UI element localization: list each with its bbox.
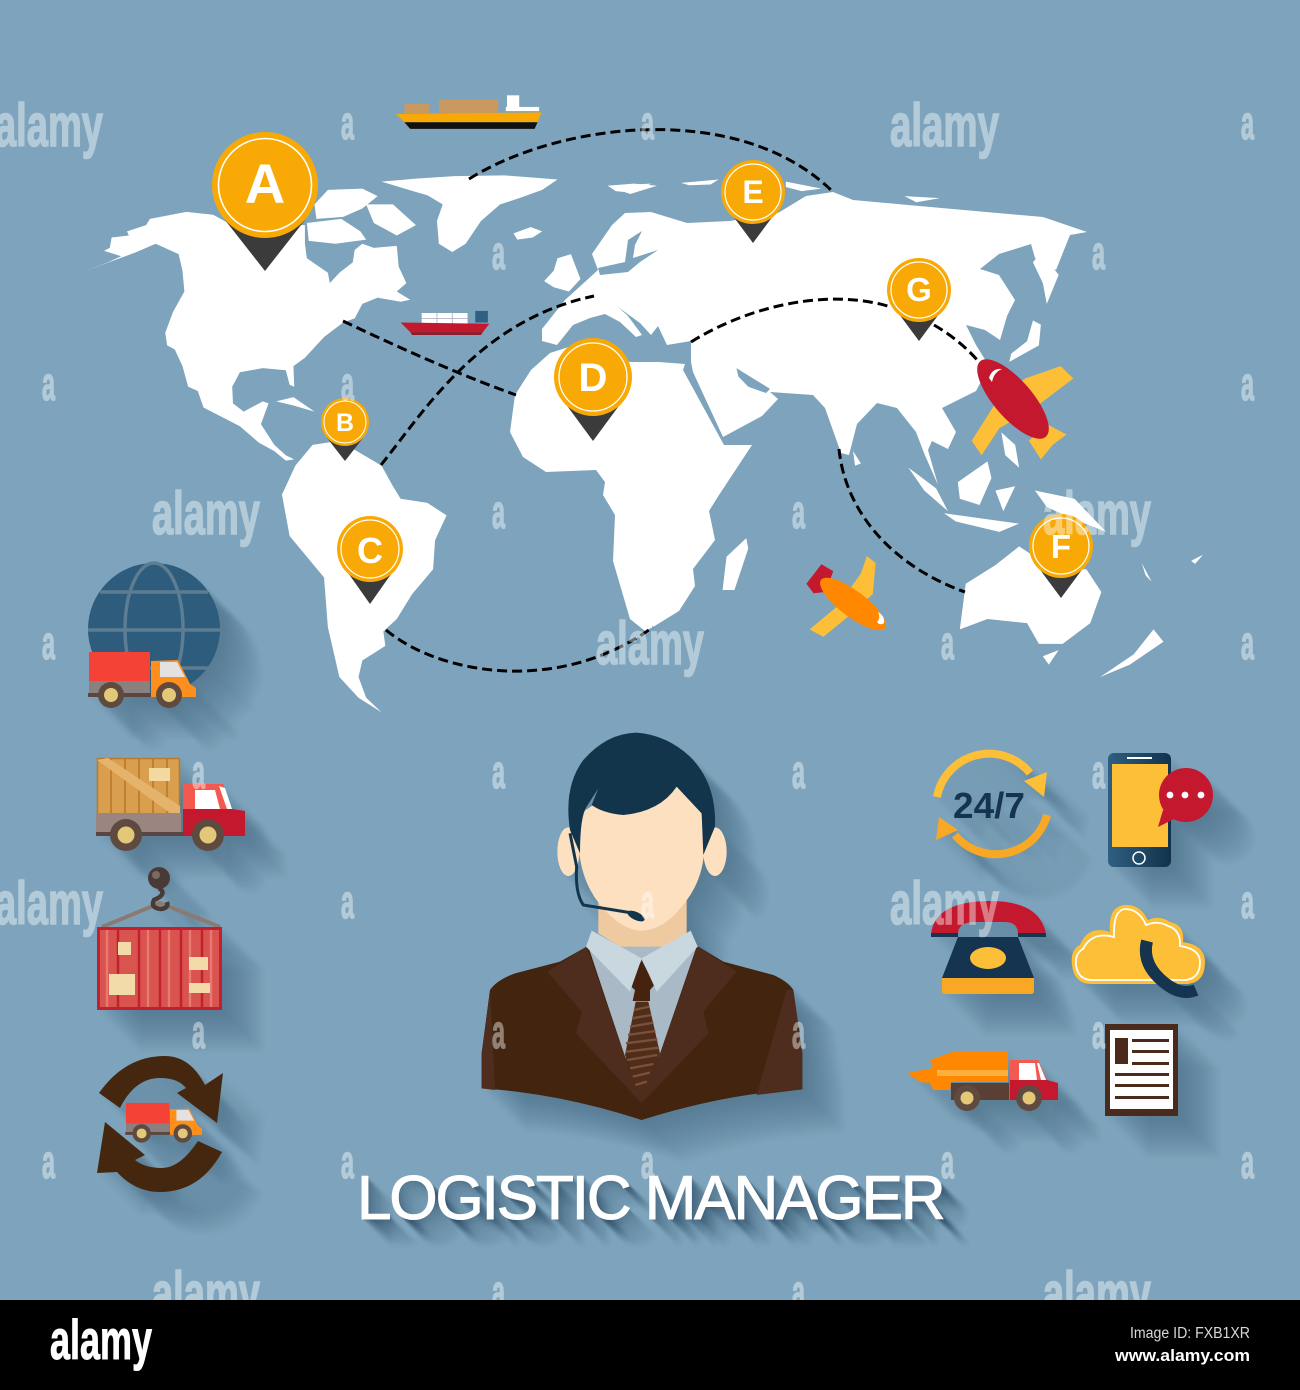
alamy watermarks: a [341, 875, 354, 928]
small truck [125, 1103, 202, 1143]
alamy watermarks: a [42, 616, 55, 669]
alamy watermarks: a [1241, 357, 1254, 410]
chat bubble [1158, 768, 1213, 827]
truck body [88, 652, 196, 708]
image id: Image ID: FXB1XR [1130, 1325, 1250, 1342]
alamy watermarks: a [341, 96, 354, 149]
alamy watermarks: alamy [890, 870, 999, 937]
alamy watermarks: alamy [152, 1260, 260, 1327]
map: asia-pacific islands and australia [608, 180, 1203, 677]
alamy watermarks: a [941, 1135, 954, 1188]
icon: globe with truck [88, 563, 220, 708]
manager figure [482, 733, 802, 1120]
icon: rotary telephone [931, 901, 1046, 994]
pin F: F [1051, 528, 1071, 565]
icon: 24/7 [936, 754, 1047, 854]
alamy watermarks: a [641, 875, 654, 928]
website: www.alamy.com [1114, 1346, 1250, 1365]
pin B [321, 398, 369, 461]
icon: speeding truck with flames [907, 1051, 1058, 1111]
icon: circular arrows with truck [97, 1056, 223, 1192]
pin C [337, 516, 403, 604]
alamy watermarks: a [1241, 875, 1254, 928]
alamy watermarks: a [341, 1135, 354, 1188]
icon: smartphone with chat bubble [1108, 753, 1213, 867]
alamy watermarks: alamy [1043, 1260, 1151, 1327]
pin F [1029, 514, 1093, 598]
map: south america [282, 441, 447, 712]
alamy watermarks: a [1092, 226, 1105, 279]
alamy watermarks: a [192, 745, 205, 798]
alamy watermarks: a [792, 485, 805, 538]
alamy watermarks: alamy [596, 610, 704, 677]
map: africa [510, 345, 752, 631]
pin A [212, 132, 318, 271]
alamy watermarks: alamy [1043, 480, 1151, 547]
alamy watermarks: a [1092, 745, 1105, 798]
footer logo: alamy [50, 1308, 152, 1371]
cargo ship: red [401, 311, 489, 335]
icon: container on crane hook [97, 867, 222, 1010]
pin D: D [579, 356, 607, 400]
airplane: orange [806, 556, 893, 638]
alamy watermarks: a [1241, 96, 1254, 149]
alamy watermarks: alamy [0, 870, 103, 937]
alamy watermarks: a [42, 357, 55, 410]
alamy watermarks: a [492, 745, 505, 798]
pin G: G [906, 271, 932, 308]
alamy watermarks: a [492, 1265, 505, 1318]
alamy watermarks: a [792, 1005, 805, 1058]
map: eurasia [542, 192, 1087, 485]
footer bar [0, 1300, 1300, 1390]
icon: 24/7: 24/7 [953, 785, 1025, 826]
alamy watermarks: a [792, 745, 805, 798]
alamy watermarks: a [792, 1265, 805, 1318]
alamy watermarks: a [1241, 616, 1254, 669]
alamy watermarks: a [941, 616, 954, 669]
alamy watermarks: a [1092, 1005, 1105, 1058]
headset [570, 833, 646, 924]
pin B: B [336, 409, 354, 437]
map: greenland and north atlantic islands [381, 175, 657, 291]
world map [84, 175, 1203, 712]
pin E [721, 160, 785, 243]
alamy watermarks: a [492, 226, 505, 279]
dashed routes [343, 130, 979, 671]
alamy watermarks: a [42, 1135, 55, 1188]
map: north america [84, 189, 416, 461]
pin A: A [245, 152, 285, 215]
alamy watermarks: a [341, 616, 354, 669]
alamy watermarks: alamy [0, 92, 103, 159]
pin D [554, 338, 632, 441]
alamy watermarks: a [341, 357, 354, 410]
alamy watermarks: a [492, 1005, 505, 1058]
icon: crate truck [96, 758, 245, 851]
pin G [887, 258, 951, 341]
alamy watermarks: a [192, 1005, 205, 1058]
alamy watermarks: a [641, 96, 654, 149]
map: baltic sea [598, 231, 658, 275]
alamy watermarks: alamy [890, 92, 999, 159]
alamy watermarks: a [492, 485, 505, 538]
alamy watermarks: a [641, 1135, 654, 1188]
pin E: E [742, 174, 764, 210]
pin C: C [357, 530, 383, 571]
airplane: red and yellow [966, 349, 1073, 459]
icon: cloud with handset [1072, 905, 1205, 992]
alamy watermarks: a [1241, 1135, 1254, 1188]
alamy watermarks: alamy [152, 480, 260, 547]
title: LOGISTIC MANAGER [357, 1164, 944, 1233]
icon: document [1105, 1024, 1178, 1116]
cargo ship: orange [396, 95, 541, 129]
